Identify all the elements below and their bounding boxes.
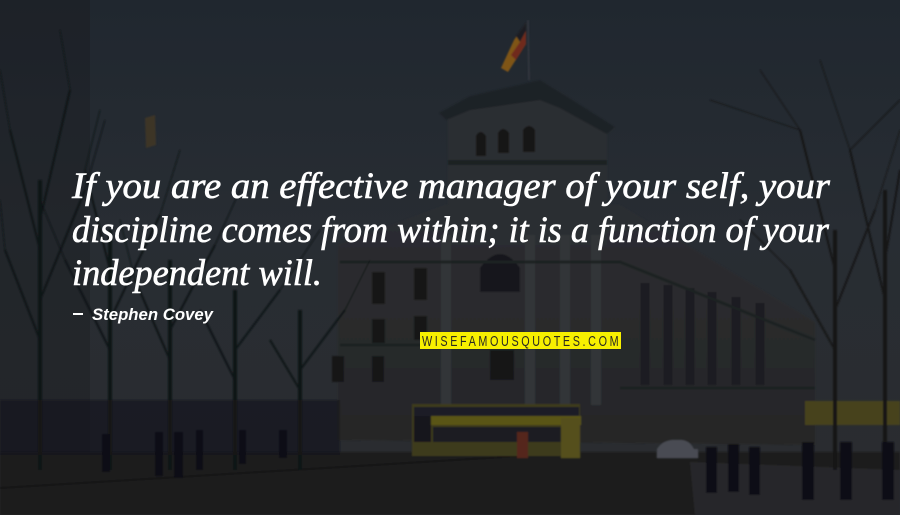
author dash <box>73 313 83 315</box>
car <box>657 440 698 458</box>
author: Stephen Covey <box>92 305 215 324</box>
road <box>0 452 900 515</box>
left trees <box>0 30 370 470</box>
quote text <box>71 166 831 294</box>
flag <box>501 20 529 80</box>
quote text: independent will. <box>72 253 322 294</box>
quote text: discipline comes from within; it is a function of your <box>72 210 830 251</box>
right trees <box>710 60 900 470</box>
tower <box>440 80 615 245</box>
building <box>332 80 815 445</box>
small flag left <box>145 115 156 148</box>
facade windows <box>480 254 520 292</box>
dark left side <box>0 0 90 515</box>
watermark badge: WISEFAMOUSQUOTES.COM <box>422 332 619 349</box>
yellow double-decker bus <box>412 404 581 458</box>
yellow vehicle right <box>805 401 900 425</box>
quote text: If you are an effective manager of your self, your <box>71 166 831 207</box>
pedestrians <box>102 430 894 500</box>
